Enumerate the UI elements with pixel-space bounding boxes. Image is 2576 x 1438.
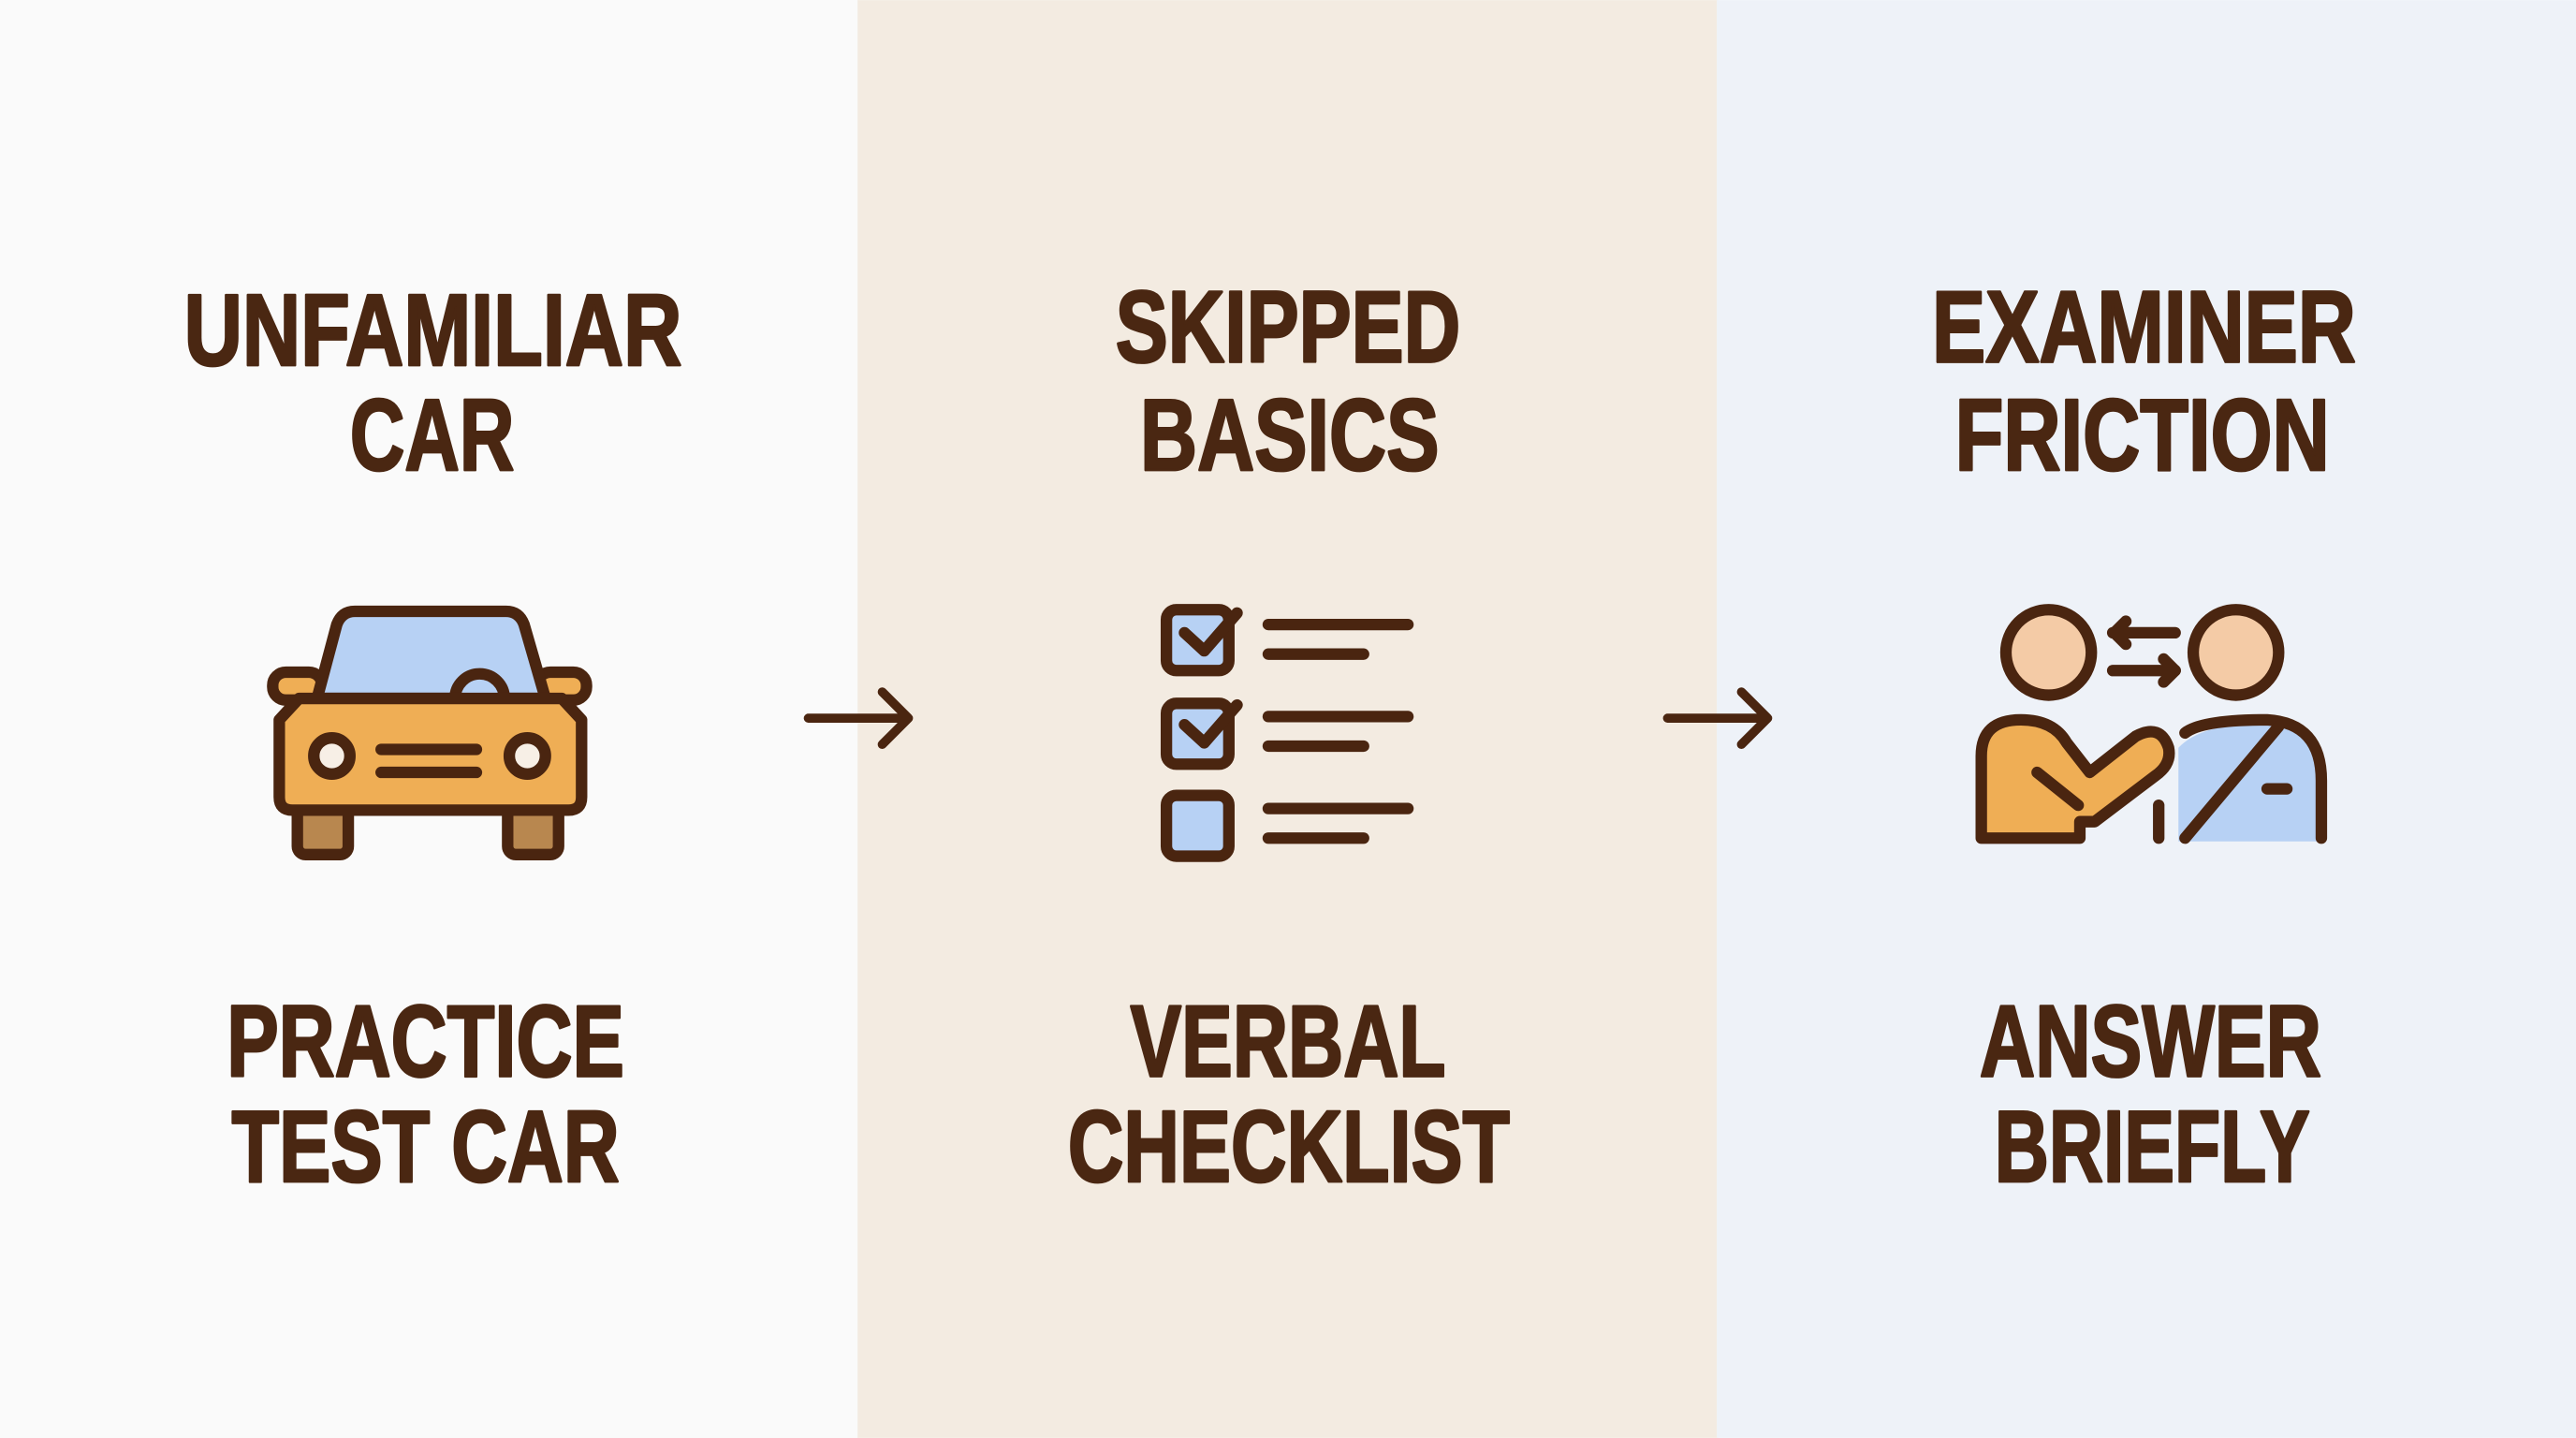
arrow 1 — [809, 692, 909, 744]
text: verbal checklist: CHECKLIST — [1068, 1090, 1510, 1204]
panel: unfamiliar car — [184, 273, 681, 1204]
text: answer briefly: ANSWER — [1980, 985, 2321, 1099]
heading: unfamiliar car — [184, 273, 681, 492]
text: practice test car: PRACTICE — [227, 985, 624, 1099]
heading: examiner friction: EXAMINER — [1932, 270, 2356, 384]
heading: skipped basics: SKIPPED — [1116, 270, 1460, 384]
heading: skipped basics — [1116, 270, 1460, 492]
text: practice test car: TEST CAR — [231, 1090, 620, 1204]
heading: examiner friction — [1932, 270, 2356, 492]
heading: unfamiliar car: UNFAMILIAR — [184, 273, 681, 388]
icon: car — [272, 611, 587, 855]
heading: examiner friction: FRICTION — [1955, 378, 2330, 492]
heading: unfamiliar car: CAR — [350, 378, 514, 492]
icon: checklist — [1166, 609, 1408, 857]
text: answer briefly — [1980, 985, 2321, 1204]
text: verbal checklist: VERBAL — [1131, 985, 1445, 1099]
arrow 2 — [1667, 692, 1767, 744]
text: practice test car — [227, 985, 624, 1204]
text: answer briefly: BRIEFLY — [1995, 1090, 2310, 1204]
icon: two people — [1982, 609, 2321, 842]
panel: skipped basics — [1068, 270, 1510, 1204]
text: verbal checklist — [1068, 985, 1510, 1204]
panel: examiner friction — [1932, 270, 2356, 1204]
heading: skipped basics: BASICS — [1140, 378, 1439, 492]
